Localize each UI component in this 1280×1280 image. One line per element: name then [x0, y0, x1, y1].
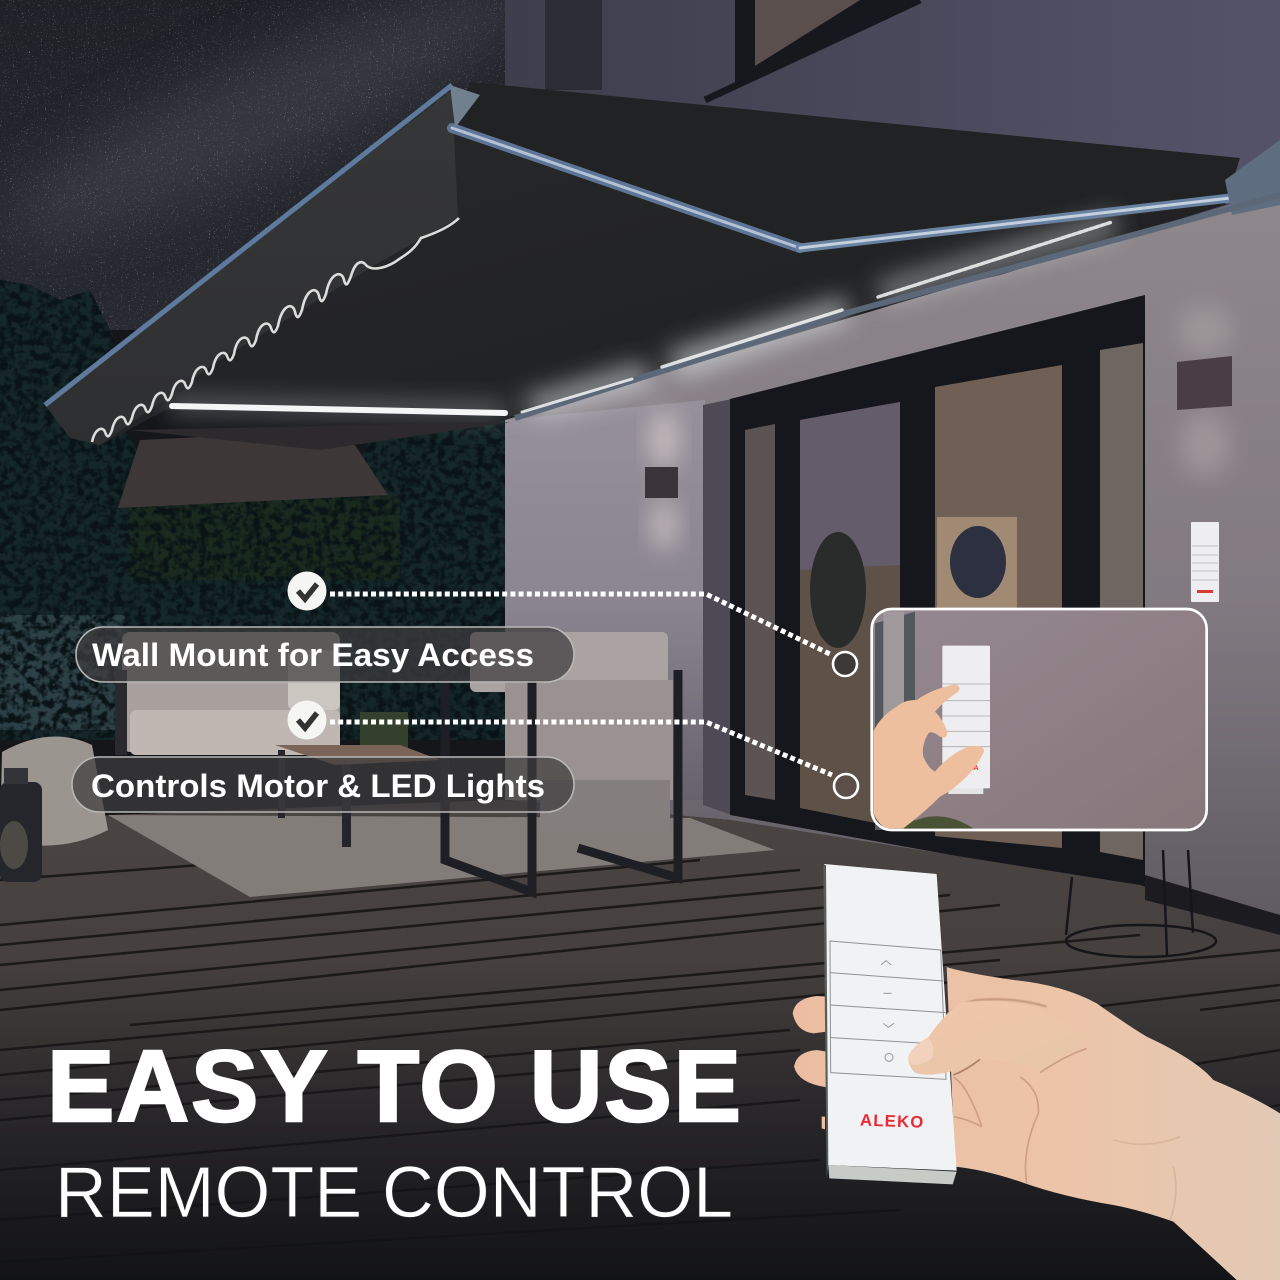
- neighbouring roof: [118, 430, 388, 508]
- check icon: bottom: [288, 700, 326, 740]
- remote: ALEKO: [860, 1111, 924, 1132]
- inset hand: [873, 684, 984, 828]
- coffee table: [275, 745, 440, 847]
- wall-side rail: [515, 195, 1280, 418]
- awning under fabric: [95, 130, 1228, 448]
- right wall bracket: [1225, 140, 1280, 215]
- wire planter stand: [1066, 850, 1216, 957]
- lit underside glow: [170, 212, 1118, 420]
- trees and hedge: [0, 280, 510, 740]
- awning top fabric panel: [455, 82, 1240, 248]
- LED strips: [172, 222, 1112, 413]
- wall lamp left with glow: [645, 410, 678, 551]
- callout lines: [330, 594, 832, 775]
- armchair: [445, 632, 678, 892]
- inset remote: [942, 646, 990, 794]
- awning: [45, 82, 1280, 450]
- wall lamp right with glow: [1177, 306, 1232, 477]
- title: [47, 1031, 741, 1233]
- valance top rail: [45, 85, 452, 405]
- sliding door: [730, 295, 1145, 890]
- remote: [823, 864, 957, 1184]
- door recess: [703, 399, 732, 815]
- baseboard: [1145, 875, 1280, 935]
- left wall section: [505, 400, 705, 800]
- inset border: [872, 609, 1207, 830]
- subtitle: REMOTE CONTROL: [55, 1153, 733, 1233]
- night sky with milky way: [0, 0, 557, 330]
- thumb: [908, 1001, 1090, 1075]
- inset photo: wall mounted remote: [872, 609, 1207, 830]
- title: EASY TO USE: [47, 1031, 741, 1143]
- upper house wall: [505, 0, 1280, 230]
- palm and wrist: [793, 967, 1280, 1280]
- target ring: top: [833, 652, 857, 676]
- pill: controls: Controls Motor & LED Lights: [91, 768, 545, 804]
- floor pouf: [0, 736, 108, 846]
- lantern: [0, 768, 42, 882]
- pill: controls: [72, 757, 574, 812]
- rug: [108, 815, 775, 897]
- pill: wall mount: [76, 627, 574, 682]
- thumb nail: [908, 1038, 934, 1065]
- valance scalloped edge: [92, 218, 459, 442]
- palm creases: [953, 1048, 1180, 1220]
- outdoor sofa: [115, 632, 408, 762]
- wooden deck: [0, 800, 1280, 1280]
- shadow between index finger and thumb: [947, 999, 1047, 1015]
- target ring: bottom: [834, 774, 858, 798]
- bottom dark fade: [0, 960, 1280, 1280]
- inset remote: ALEKA: [953, 763, 979, 772]
- small wall remote: [1191, 522, 1219, 602]
- top bracket: [450, 85, 480, 128]
- front valance: [45, 90, 458, 445]
- lower wall: [505, 190, 1280, 930]
- folding arm: [452, 128, 1230, 248]
- arm below front: [130, 422, 510, 450]
- check icon: top: [288, 572, 326, 610]
- hand holding remote: [793, 864, 1280, 1280]
- pill: wall mount: Wall Mount for Easy Access: [92, 637, 534, 673]
